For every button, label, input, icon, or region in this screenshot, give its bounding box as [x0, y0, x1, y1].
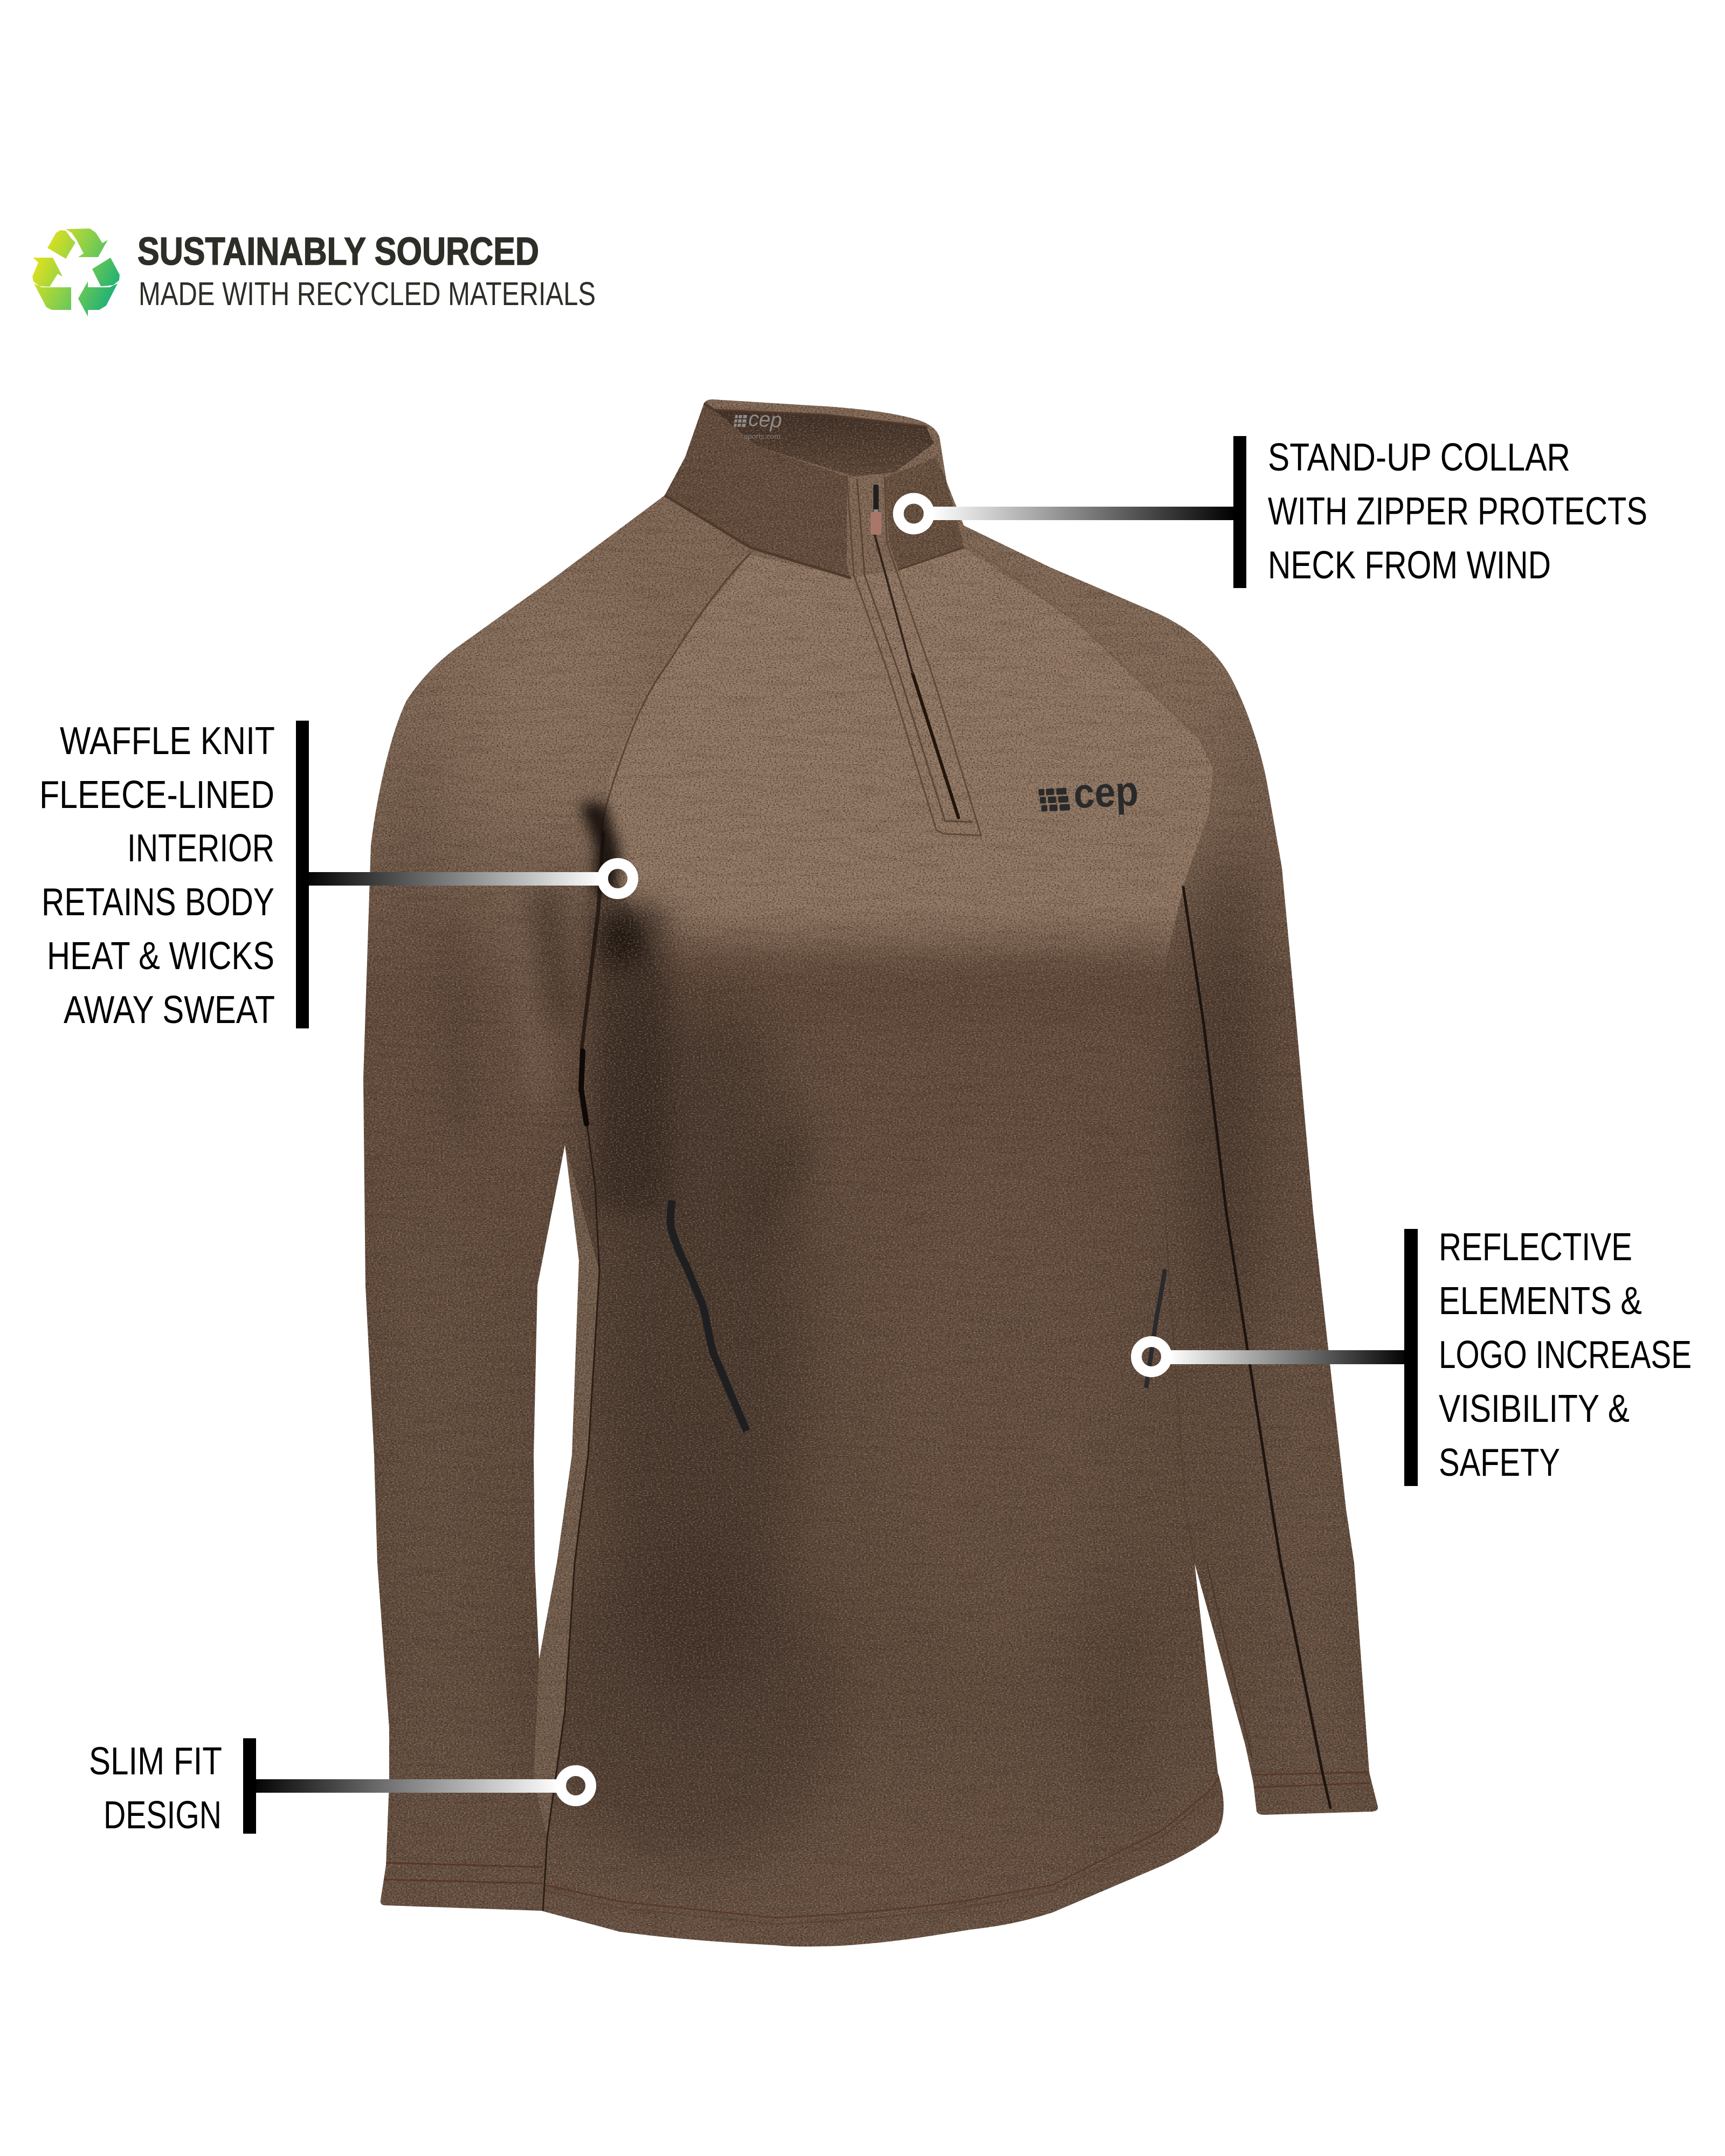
callout: slim fit	[89, 1738, 591, 1837]
fabric texture	[323, 377, 1402, 1967]
soft shading	[372, 582, 1353, 1865]
left reflective strip	[671, 1200, 747, 1431]
right collar panel	[885, 457, 964, 570]
collar logo: sports.com	[744, 432, 781, 440]
marker ring	[561, 1771, 591, 1801]
fold shading	[448, 884, 1148, 1218]
callout text: VISIBILITY &	[1439, 1387, 1630, 1431]
product: brown quarter-zip pullover	[323, 377, 1402, 1967]
zipper pull	[871, 485, 881, 535]
callout text: STAND-UP COLLAR	[1268, 436, 1570, 479]
chest panel	[602, 548, 1214, 992]
back sleeve sliver	[534, 1145, 599, 1838]
callout text: REFLECTIVE	[1439, 1226, 1632, 1269]
callout text: ELEMENTS &	[1439, 1280, 1642, 1323]
callout text: RETAINS BODY	[42, 881, 274, 924]
subheading: recycled materials: MADE WITH RECYCLED MATERIALS	[139, 275, 596, 312]
callout text	[39, 720, 275, 1032]
callout text: INTERIOR	[127, 827, 274, 870]
marker ring	[1136, 1342, 1167, 1372]
marker ring	[603, 863, 633, 894]
callout text: DESIGN	[104, 1794, 222, 1837]
chest logo	[1038, 767, 1139, 819]
callout text: NECK FROM WIND	[1268, 544, 1551, 587]
sustainability badge	[32, 229, 596, 316]
seams and stitching	[382, 403, 1369, 1924]
collar logo: cep	[748, 407, 783, 432]
connector line	[932, 507, 1236, 520]
callout: reflective elements	[1136, 1226, 1692, 1486]
callout text: FLEECE-LINED	[39, 773, 274, 817]
callout text: AWAY SWEAT	[64, 989, 275, 1032]
callout: stand-up collar	[898, 436, 1647, 588]
inside of collar	[714, 410, 934, 476]
bracket bar	[243, 1738, 256, 1834]
callout text: HEAT & WICKS	[47, 935, 274, 978]
callout text: SLIM FIT	[89, 1740, 222, 1783]
right reflective strip	[1146, 1269, 1165, 1388]
garment fabric and shading	[323, 377, 1402, 1967]
bracket bar	[1404, 1229, 1418, 1486]
sleeve and side shadow lines	[543, 534, 1330, 1912]
armpit shadow	[579, 803, 621, 895]
bracket bar	[1233, 436, 1246, 588]
connector line	[1169, 1350, 1410, 1364]
icon: recycling arrows	[32, 229, 120, 316]
callout text	[89, 1740, 222, 1837]
callout text: WAFFLE KNIT	[60, 720, 275, 763]
heading: sustainably sourced: SUSTAINABLY SOURCED	[137, 230, 539, 273]
connector line	[249, 1779, 560, 1793]
callout text	[1439, 1226, 1692, 1484]
callout text: SAFETY	[1439, 1441, 1560, 1484]
callout text	[1268, 436, 1647, 587]
marker ring	[898, 498, 929, 529]
connector line	[303, 872, 602, 886]
collar logo	[734, 407, 783, 440]
left collar panel	[665, 403, 850, 578]
bracket bar	[296, 721, 309, 1028]
callout: waffle knit	[39, 720, 633, 1032]
chest logo: cep	[1073, 767, 1139, 817]
